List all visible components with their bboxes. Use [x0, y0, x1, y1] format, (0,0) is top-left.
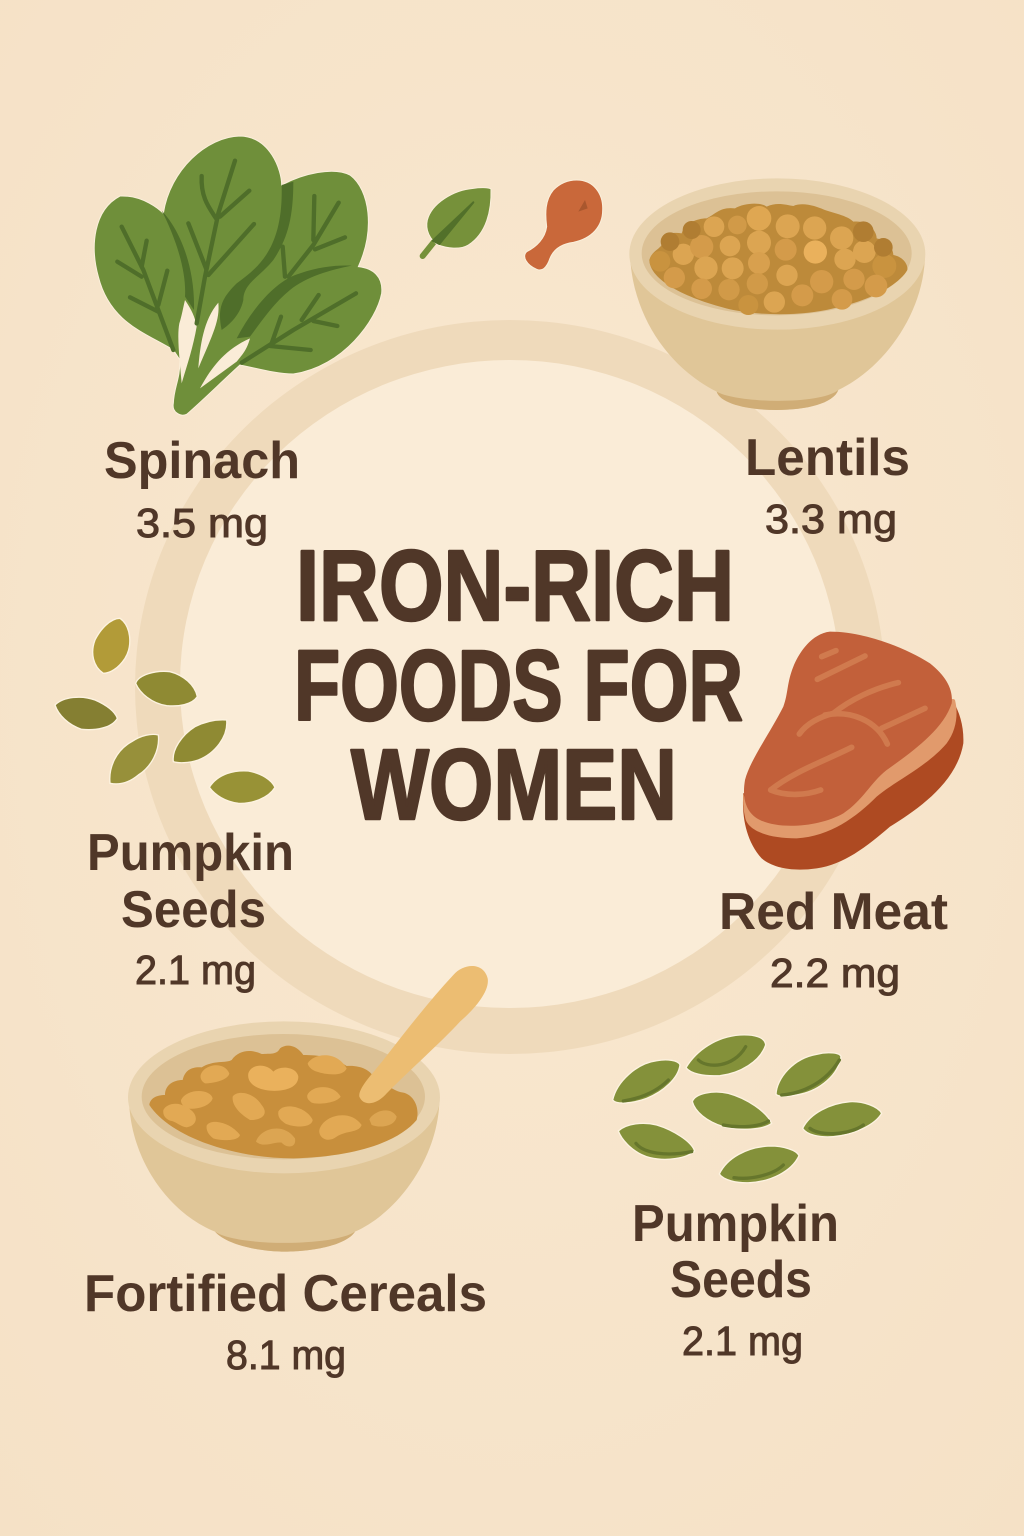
- title: FOODS FOR: [294, 630, 743, 742]
- label: pumpkin seeds left: Seeds: [121, 881, 266, 939]
- icon: spinach: [94, 136, 382, 415]
- icon: steak: [743, 632, 963, 870]
- icon: pumpkin seeds right: [613, 1035, 882, 1183]
- lentils mass: [649, 204, 907, 314]
- title: [294, 530, 743, 841]
- icon: spoon: [359, 966, 488, 1103]
- label: pumpkin seeds left: Pumpkin: [87, 824, 294, 882]
- label: pumpkin seeds right: 2.1 mg: [682, 1318, 803, 1364]
- label: spinach: 3.5 mg: [136, 500, 268, 546]
- icon: chicken drumstick: [525, 180, 603, 270]
- label: fortified cereals: [84, 1265, 487, 1378]
- cereal mass: [149, 1046, 418, 1158]
- label: pumpkin seeds left: 2.1 mg: [135, 947, 256, 993]
- label: spinach: Spinach: [104, 432, 300, 490]
- title: WOMEN: [351, 729, 677, 841]
- label: pumpkin seeds right: [632, 1195, 839, 1364]
- veins: [117, 161, 356, 363]
- label: spinach: [104, 432, 300, 546]
- label: lentils: [745, 429, 910, 542]
- label: pumpkin seeds left: [87, 824, 294, 993]
- central ring: [135, 320, 885, 1054]
- title: IRON-RICH: [296, 530, 734, 642]
- label: pumpkin seeds right: Seeds: [670, 1251, 812, 1309]
- label: lentils: Lentils: [745, 429, 910, 487]
- gaps between stems: [178, 300, 197, 383]
- label: lentils: 3.3 mg: [765, 496, 897, 542]
- icon: pumpkin seeds left: [55, 618, 275, 803]
- icon: cereal bowl: [128, 1021, 440, 1252]
- icon: lentil bowl: [629, 178, 925, 410]
- label: red meat: Red Meat: [719, 883, 948, 941]
- label: pumpkin seeds right: Pumpkin: [632, 1195, 839, 1253]
- label: red meat: [719, 883, 948, 996]
- label: red meat: 2.2 mg: [770, 950, 900, 996]
- icon: small leaf: [423, 188, 491, 256]
- label: fortified cereals: 8.1 mg: [226, 1332, 346, 1378]
- label: fortified cereals: Fortified Cereals: [84, 1265, 487, 1323]
